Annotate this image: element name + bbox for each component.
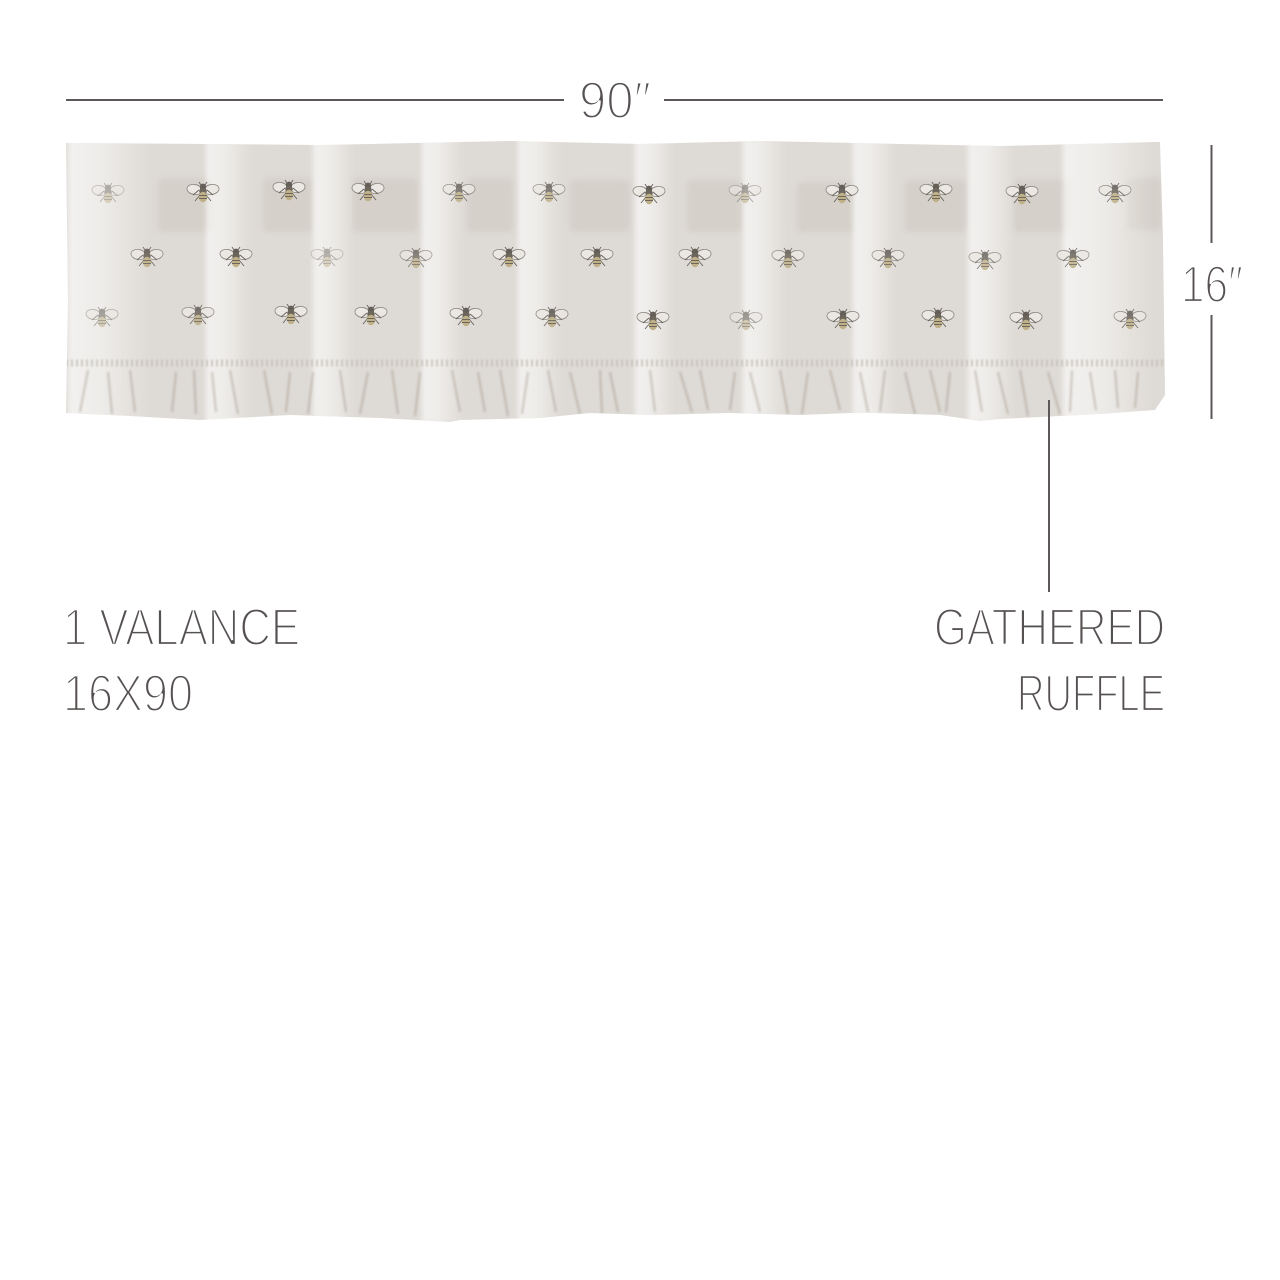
- label: gathered ruffle: [934, 599, 1165, 723]
- label: gathered ruffle: GATHERED: [934, 599, 1165, 657]
- embroidered bees: [85, 180, 1147, 330]
- label: 1 valance 16x90: 16X90: [63, 665, 193, 723]
- label: 1 valance 16x90: [63, 599, 300, 723]
- infographic canvas: [66, 82, 1241, 710]
- valance product photo: [60, 138, 1170, 423]
- label: 1 valance 16x90: 1 VALANCE: [63, 599, 300, 657]
- callout line to ruffle: [1048, 400, 1050, 592]
- ruffle pleats: [80, 370, 1138, 416]
- label: gathered ruffle: RUFFLE: [1017, 665, 1165, 723]
- gathered stitching: [66, 360, 1163, 366]
- pocket tabs: [158, 178, 1162, 232]
- width dimension: 90 inches: 90″: [579, 72, 651, 130]
- pleat highlights: [68, 138, 1153, 423]
- height dimension: 16 inches: 16″: [1181, 256, 1243, 314]
